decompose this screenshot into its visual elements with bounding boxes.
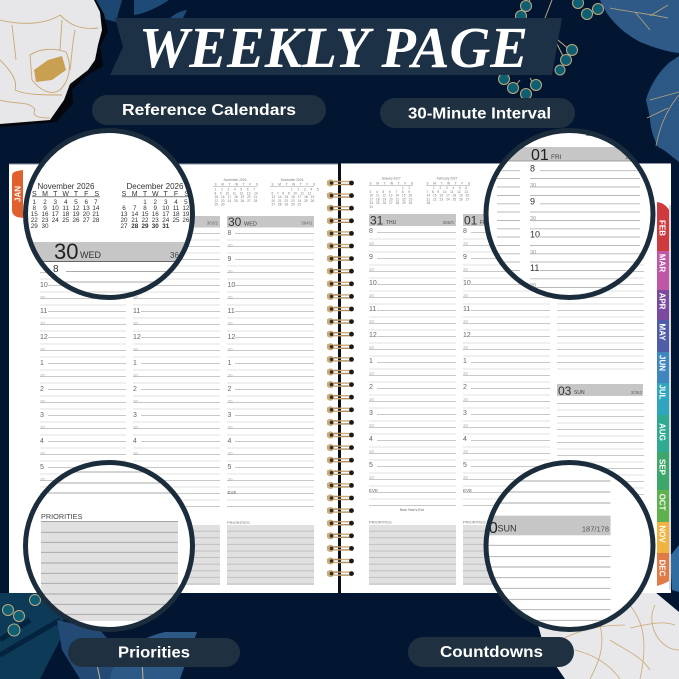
enlarged November calendar: November 2026 xyxy=(38,182,95,191)
mini calendar: February 2027: 1 2 3 4 5 6 xyxy=(433,186,467,190)
day column: right 2: 30 xyxy=(463,371,469,376)
enlarged November calendar: T xyxy=(53,191,58,198)
month tabs: MAR xyxy=(658,254,666,272)
magnifier: countdowns xyxy=(480,462,653,630)
day column: left 1: 5 xyxy=(40,464,44,471)
decoration: berries top xyxy=(498,0,604,100)
day column: right 1: 11 xyxy=(369,306,376,313)
day column: right 1: 30 xyxy=(369,319,375,324)
day column: left 3: 30 xyxy=(228,243,233,248)
enlarged November calendar: 19 xyxy=(72,211,80,218)
label: Countdowns xyxy=(408,637,574,667)
mini calendar: December 2026 xyxy=(270,178,319,207)
enlarged December calendar: 4 xyxy=(174,199,178,206)
month tabs: APR xyxy=(658,293,666,310)
mini calendar: February 2027: S M T W T F S xyxy=(426,181,470,185)
day column: right 1: 30 xyxy=(369,371,375,376)
enlarged December calendar: M xyxy=(132,191,138,198)
enlarged countdown header: 30 xyxy=(480,520,498,537)
day column: left 3: 364/1 xyxy=(301,220,313,226)
enlarged day header: 364/1 xyxy=(170,251,191,260)
day column: left 1: 30 xyxy=(40,399,46,404)
enlarged November calendar: 1 xyxy=(33,199,37,206)
tab: JAN: JAN xyxy=(14,186,22,202)
day column: left 3: 2 xyxy=(228,386,232,393)
day column: right 1: 8 xyxy=(369,228,373,235)
title: WEEKLY PAGE xyxy=(139,15,528,80)
day column: right 2: 1 xyxy=(463,358,467,365)
enlarged hour labels: 30 xyxy=(530,250,536,256)
mini calendar: November 2026: S M T W T F S xyxy=(214,182,258,186)
day column: left 2: 4 xyxy=(133,438,137,445)
enlarged November calendar: 11 xyxy=(62,205,69,212)
mini calendar: January 2027: January 2027 xyxy=(381,176,401,180)
day column: left 3: 30 xyxy=(228,451,233,456)
day column: right 2: 11 xyxy=(463,306,470,313)
day column: right 2: 30 xyxy=(463,345,469,350)
enlarged November calendar: 3 xyxy=(54,199,58,206)
day column: left 2 xyxy=(133,216,220,508)
day column: right 2: 2 xyxy=(463,384,467,391)
priorities heading: PRIORITIES xyxy=(41,512,82,521)
enlarged December calendar: 27 xyxy=(120,223,128,230)
label: Reference Calendars xyxy=(92,95,326,125)
day column: left 3: 30 xyxy=(228,373,233,378)
day column: left 3: 30 xyxy=(228,269,233,274)
day column: right 2: 30 xyxy=(463,241,469,246)
enlarged November calendar: 29 xyxy=(31,223,38,230)
priorities boxes: right xyxy=(369,520,550,585)
day column: right 1: 9 xyxy=(369,254,373,261)
enlarged hour labels: 8 xyxy=(530,164,535,174)
day column: right 2: 30 xyxy=(463,423,469,428)
month tabs: DEC xyxy=(658,560,666,577)
day column: right 1: 30 xyxy=(369,267,375,272)
enlarged hour labels: 30 xyxy=(530,183,536,189)
day column: right 1: THU xyxy=(386,220,397,226)
day column: right 3 with 03 SUN xyxy=(557,232,644,507)
mini calendar: January 2027: 31 xyxy=(370,205,373,209)
day column: left 1: 10 xyxy=(40,282,48,289)
day column: left 2: 30 xyxy=(133,451,139,456)
enlarged December calendar: F xyxy=(174,191,178,198)
enlarged December calendar: 22 xyxy=(141,217,149,224)
day column: right 2: 12 xyxy=(463,332,471,339)
day column: left 2: 2 xyxy=(133,386,137,393)
day column: left 3: 3 xyxy=(228,412,232,419)
enlarged countdown header: SUN xyxy=(498,524,517,534)
mini calendar: February 2027 xyxy=(426,176,470,205)
day column: right 1: 30 xyxy=(369,345,375,350)
mini calendar: February 2027: 21 22 23 24 25 26 27 xyxy=(426,197,469,201)
enlarged December calendar: 6 xyxy=(122,205,126,212)
day column: right 1: 1 xyxy=(369,358,373,365)
day column: right 1: 30 xyxy=(369,397,375,402)
enlarged December calendar: 2 xyxy=(154,199,158,206)
day column: left 3: 30 xyxy=(228,321,233,326)
day column: right 2: 30 xyxy=(463,293,469,298)
day column: left 3: 11 xyxy=(228,308,235,315)
enlarged hour row: 8 xyxy=(53,264,59,275)
day column: left 1: 3 xyxy=(40,412,44,419)
enlarged countdown header: 187/178 xyxy=(582,524,609,534)
mini calendar: January 2027: 3 4 5 6 7 8 9 xyxy=(370,190,410,194)
tab: JAN xyxy=(12,170,23,218)
enlarged November calendar: 4 xyxy=(64,199,68,206)
day column: right 1: 30 xyxy=(369,449,375,454)
day column: right 2: 30 xyxy=(463,267,469,272)
mini calendar: December 2026: 6 7 8 9 10 11 12 xyxy=(272,191,311,195)
magnifier: priorities xyxy=(26,462,192,630)
day column: right 1 xyxy=(369,214,456,512)
left page xyxy=(9,164,338,593)
enlarged December calendar: 20 xyxy=(120,217,128,224)
day column: left 2: 12 xyxy=(133,334,141,341)
day column: right 2: FRI xyxy=(480,220,488,226)
mini calendar: February 2027: 28 xyxy=(426,201,430,205)
enlarged November calendar: 24 xyxy=(52,217,59,224)
enlarged December calendar: 7 xyxy=(133,205,137,212)
day column: left 3: 30 xyxy=(228,425,233,430)
enlarged hour row xyxy=(53,265,166,292)
day column: right 1: New Year's Eve xyxy=(400,508,424,512)
day column: right 1: 4 xyxy=(369,436,373,443)
day column: right 2: 01 xyxy=(464,214,478,228)
day column: left 1: 30 xyxy=(40,451,46,456)
enlarged December calendar: 18 xyxy=(172,211,180,218)
day column: left 2: 30 xyxy=(133,477,139,482)
day column: left 3: 30 xyxy=(228,477,233,482)
day column: right 1: 30 xyxy=(369,475,375,480)
enlarged December calendar: 17 xyxy=(162,211,170,218)
enlarged November calendar: F xyxy=(84,191,88,198)
enlarged November calendar: M xyxy=(42,191,48,198)
enlarged December calendar: 24 xyxy=(162,217,170,224)
month tabs: JUN xyxy=(658,355,666,371)
enlarged November calendar: 12 xyxy=(72,205,80,212)
priorities boxes: left: PRIORITIES xyxy=(227,520,250,525)
enlarged day header xyxy=(33,242,185,262)
mini calendar: January 2027: S M T W T F S xyxy=(370,181,413,185)
enlarged November calendar: 16 xyxy=(41,211,49,218)
enlarged December calendar: 16 xyxy=(152,211,159,218)
enlarged December calendar: 3 xyxy=(164,199,168,206)
enlarged November calendar: 25 xyxy=(62,217,70,224)
enlarged November calendar: W xyxy=(62,191,69,198)
mini calendar: November 2026: November 2026 xyxy=(224,178,247,182)
label: 30-Minute Interval: 30-Minute Interval xyxy=(408,106,551,122)
mini calendar: January 2027: 10 11 12 13 14 15 16 xyxy=(370,194,412,198)
enlarged December calendar: 28 xyxy=(131,223,139,230)
decoration: bottom-right flower xyxy=(538,545,679,679)
enlarged day header: FRI xyxy=(551,154,562,161)
label: Priorities xyxy=(68,638,240,667)
day column: right 2: 30 xyxy=(463,449,469,454)
enlarged November calendar: 18 xyxy=(62,211,70,218)
day column: left 3: WED xyxy=(244,222,257,228)
enlarged hour labels: 10 xyxy=(530,230,540,240)
day column: right 2 xyxy=(463,214,550,507)
enlarged December calendar: 12 xyxy=(182,205,190,212)
day column: left 1: 1 xyxy=(40,360,44,367)
enlarged November calendar: 27 xyxy=(83,217,90,224)
mini calendar: January 2027 xyxy=(369,176,413,209)
enlarged November calendar: 30 xyxy=(41,223,49,230)
enlarged November calendar: 20 xyxy=(83,211,90,218)
enlarged hour labels: 11 xyxy=(530,263,539,273)
enlarged December calendar: 31 xyxy=(162,223,170,230)
day column: left 3: 5 xyxy=(228,464,232,471)
enlarged December calendar: 14 xyxy=(131,211,139,218)
mini calendar: November 2026: 29 30 xyxy=(214,203,225,207)
enlarged November calendar: S xyxy=(94,191,99,198)
day column: right 1: 3 xyxy=(369,410,373,417)
day column: right 2: 8 xyxy=(463,228,467,235)
mini calendar: November 2026 xyxy=(213,178,258,207)
month tabs: MAY xyxy=(658,323,666,341)
enlarged countdown header xyxy=(489,516,611,536)
day column: left 1: 30 xyxy=(40,477,46,482)
day column: right 1: EVE xyxy=(369,488,378,493)
decoration: top-right leaves xyxy=(600,0,679,162)
day column: right 1: 365/0 xyxy=(443,220,454,225)
enlarged day header: 1/364 xyxy=(625,155,641,161)
enlarged November calendar: 5 xyxy=(74,199,78,206)
enlarged November calendar: 23 xyxy=(41,217,49,224)
month tabs: FEB xyxy=(658,220,666,236)
day column: left 2: 30 xyxy=(133,425,139,430)
title banner xyxy=(110,15,562,80)
mini calendar: January 2027: 24 25 26 27 28 29 30 xyxy=(370,201,412,205)
day column: left 2: 30 xyxy=(133,321,139,326)
enlarged day header: WED xyxy=(80,250,101,260)
day column: right 1: 30 xyxy=(369,293,375,298)
enlarged November calendar: 10 xyxy=(52,205,59,212)
day column: left 3: 30 xyxy=(228,215,242,229)
mini calendar: January 2027: 17 18 19 20 21 22 23 xyxy=(370,197,412,201)
enlarged December calendar: 9 xyxy=(154,205,158,212)
mini calendar: December 2026: S M T W T F S xyxy=(272,182,315,186)
mini calendar: February 2027: February 2027 xyxy=(437,176,458,180)
day column: right 1: 12 xyxy=(369,332,377,339)
priorities box xyxy=(41,521,178,621)
day column: right 1: 30 xyxy=(369,423,375,428)
priorities boxes: left xyxy=(133,520,314,585)
day column: left 3: 30 xyxy=(228,295,233,300)
enlarged December calendar: W xyxy=(152,191,159,198)
day column: left 3: 4 xyxy=(228,438,232,445)
label: 30-Minute Interval xyxy=(380,98,575,128)
month tabs: OCT xyxy=(658,494,666,511)
mini calendar: November 2026: 8 9 10 11 12 13 14 xyxy=(214,191,258,195)
enlarged hour labels xyxy=(530,164,540,289)
enlarged day header xyxy=(508,147,631,162)
day column: left 3: 30 xyxy=(228,399,233,404)
day column: left 2: 30 xyxy=(133,347,139,352)
day column: right 3 with 03 SUN: SUN xyxy=(574,390,585,396)
enlarged November calendar: 7 xyxy=(94,199,98,206)
mini calendar: January 2027: 1 2 xyxy=(402,186,410,190)
mini calendar: December 2026: 1 2 3 4 5 xyxy=(291,188,319,192)
day column: right 2: 30 xyxy=(463,319,469,324)
enlarged November calendar: 22 xyxy=(31,217,38,224)
decoration: bottom-left leaves xyxy=(0,593,197,679)
day column: right 2: 10 xyxy=(463,280,471,287)
day column: right 3 with 03 SUN: 03 xyxy=(558,384,572,398)
enlarged December calendar: S xyxy=(184,191,189,198)
day column: left 3: 10 xyxy=(228,282,235,289)
day column: left 1: 11 xyxy=(40,308,47,315)
day column: left 1: 4 xyxy=(40,438,44,445)
enlarged hour labels: 9 xyxy=(530,196,535,206)
enlarged December calendar: T xyxy=(164,191,169,198)
day column: right 1: 31 xyxy=(370,214,384,228)
enlarged December calendar: 5 xyxy=(184,199,188,206)
day column: left 3: 9 xyxy=(228,256,232,263)
day column: left 1: 30 xyxy=(40,425,46,430)
enlarged November calendar: 17 xyxy=(52,211,59,218)
day column: left 3: 30 xyxy=(228,347,233,352)
enlarged December calendar: 25 xyxy=(172,217,180,224)
day column: left 1: 30 xyxy=(40,347,46,352)
mini calendar: December 2026: 13 14 15 16 17 18 19 xyxy=(272,195,314,199)
month tabs: AUG xyxy=(658,423,666,441)
day column: left 2: 5 xyxy=(133,464,137,471)
day column: right 1: 2 xyxy=(369,384,373,391)
enlarged December calendar: 10 xyxy=(162,205,170,212)
enlarged December calendar: 30 xyxy=(152,223,159,230)
day column: left 2: 10 xyxy=(133,282,141,289)
enlarged November calendar: 26 xyxy=(72,217,80,224)
enlarged December calendar: T xyxy=(143,191,148,198)
magnifier: reference calendars xyxy=(20,130,200,298)
day column: left 2: 1 xyxy=(133,360,137,367)
day column: right 2: 30 xyxy=(463,397,469,402)
day column: left 2: 30 xyxy=(133,373,139,378)
enlarged hour labels: 30 xyxy=(530,216,536,222)
enlarged November calendar: 9 xyxy=(43,205,47,212)
label: Countdowns: Countdowns xyxy=(440,644,543,661)
enlarged November calendar: T xyxy=(74,191,79,198)
day column: left 3: 8 xyxy=(228,230,232,237)
day column: left 3: EVE xyxy=(228,490,237,495)
enlarged November calendar: 14 xyxy=(92,205,100,212)
planner spread xyxy=(9,163,671,593)
day column: left 1: 30 xyxy=(40,373,46,378)
day column: right 2: 30 xyxy=(463,475,469,480)
month tabs: JUL xyxy=(658,384,666,400)
day column: left 1: 2 xyxy=(40,386,44,393)
enlarged December calendar: 29 xyxy=(141,223,149,230)
enlarged December calendar: 26 xyxy=(182,217,190,224)
mini calendar: November 2026: 15 16 17 18 19 20 21 xyxy=(214,195,257,199)
enlarged November calendar: 21 xyxy=(92,211,100,218)
day column: left 2: 30 xyxy=(133,295,139,300)
enlarged hour labels: 30 xyxy=(530,283,536,289)
enlarged December calendar: December 2026 xyxy=(127,182,184,191)
mini calendar: November 2026: 22 23 24 25 26 27 28 xyxy=(214,199,257,203)
enlarged November calendar xyxy=(31,182,101,230)
priorities boxes: right: PRIORITIES xyxy=(463,520,486,524)
day column: left 3: 1 xyxy=(228,360,232,367)
enlarged November calendar: 28 xyxy=(92,217,100,224)
enlarged November calendar: 15 xyxy=(31,211,38,218)
enlarged December calendar: 19 xyxy=(182,211,190,218)
enlarged December calendar: 13 xyxy=(120,211,128,218)
mini calendar: December 2026: 20 21 22 23 24 25 26 xyxy=(272,199,314,203)
day column: left 1: 30 xyxy=(40,295,46,300)
enlarged December calendar: 23 xyxy=(152,217,159,224)
day column: right 2: 5 xyxy=(463,462,467,469)
enlarged November calendar: 13 xyxy=(83,205,90,212)
magnifier: 30-minute interval xyxy=(480,130,653,298)
label: Priorities: Priorities xyxy=(118,644,190,662)
day column: right 1: 10 xyxy=(369,280,377,287)
enlarged December calendar: 11 xyxy=(173,205,180,212)
enlarged December calendar: S xyxy=(122,191,127,198)
day column: right 2: 9 xyxy=(463,254,467,261)
day column: left 1 xyxy=(40,229,126,508)
day column: left 1: 12 xyxy=(40,334,48,341)
day column: right 3 with 03 SUN: 3/362 xyxy=(631,390,642,395)
decoration: top-left flower xyxy=(0,0,187,127)
enlarged day header: 01 xyxy=(531,147,549,164)
mini calendar: February 2027: 14 15 16 17 18 19 20 xyxy=(426,194,469,198)
day column: left 3 xyxy=(227,215,314,508)
enlarged December calendar: 1 xyxy=(143,199,147,206)
enlarged November calendar: 2 xyxy=(43,199,47,206)
mini calendar: February 2027: 7 8 9 10 11 12 13 xyxy=(426,190,468,194)
enlarged November calendar: 8 xyxy=(33,205,37,212)
day column: left 1: 30 xyxy=(40,321,46,326)
enlarged December calendar: 21 xyxy=(131,217,139,224)
enlarged December calendar: 15 xyxy=(141,211,149,218)
mini calendar: December 2026: December 2026 xyxy=(281,178,304,182)
month tabs: SEP xyxy=(658,459,666,476)
day column: left 2: 363/2 xyxy=(207,220,218,226)
enlarged half-hour lines xyxy=(497,171,640,288)
label: Reference Calendars: Reference Calendars xyxy=(122,102,296,119)
enlarged November calendar: 6 xyxy=(85,199,89,206)
day column: right 1: 30 xyxy=(369,241,375,246)
mini calendar: November 2026: 1 2 3 4 5 6 7 xyxy=(214,188,255,192)
mini calendar: December 2026: 27 28 29 30 31 xyxy=(272,203,301,207)
day column: right 1: 5 xyxy=(369,462,373,469)
day column: right 2: EVE xyxy=(463,488,472,493)
month tabs: NOV xyxy=(658,525,666,543)
day column: right 2: 3 xyxy=(463,410,467,417)
day column: left 2: 30 xyxy=(133,399,139,404)
enlarged December calendar xyxy=(120,182,192,230)
right page xyxy=(341,163,671,593)
enlarged November calendar: S xyxy=(32,191,37,198)
spiral binding xyxy=(327,164,354,593)
enlarged day header: 30 xyxy=(54,239,78,264)
day column: left 2: 3 xyxy=(133,412,137,419)
priorities boxes: right: PRIORITIES xyxy=(369,520,392,524)
day column: left 3: 12 xyxy=(228,334,235,341)
day column: right 2: 4 xyxy=(463,436,467,443)
day column: left 2: 11 xyxy=(133,308,140,315)
enlarged December calendar: 8 xyxy=(143,205,147,212)
month tabs xyxy=(657,202,671,590)
